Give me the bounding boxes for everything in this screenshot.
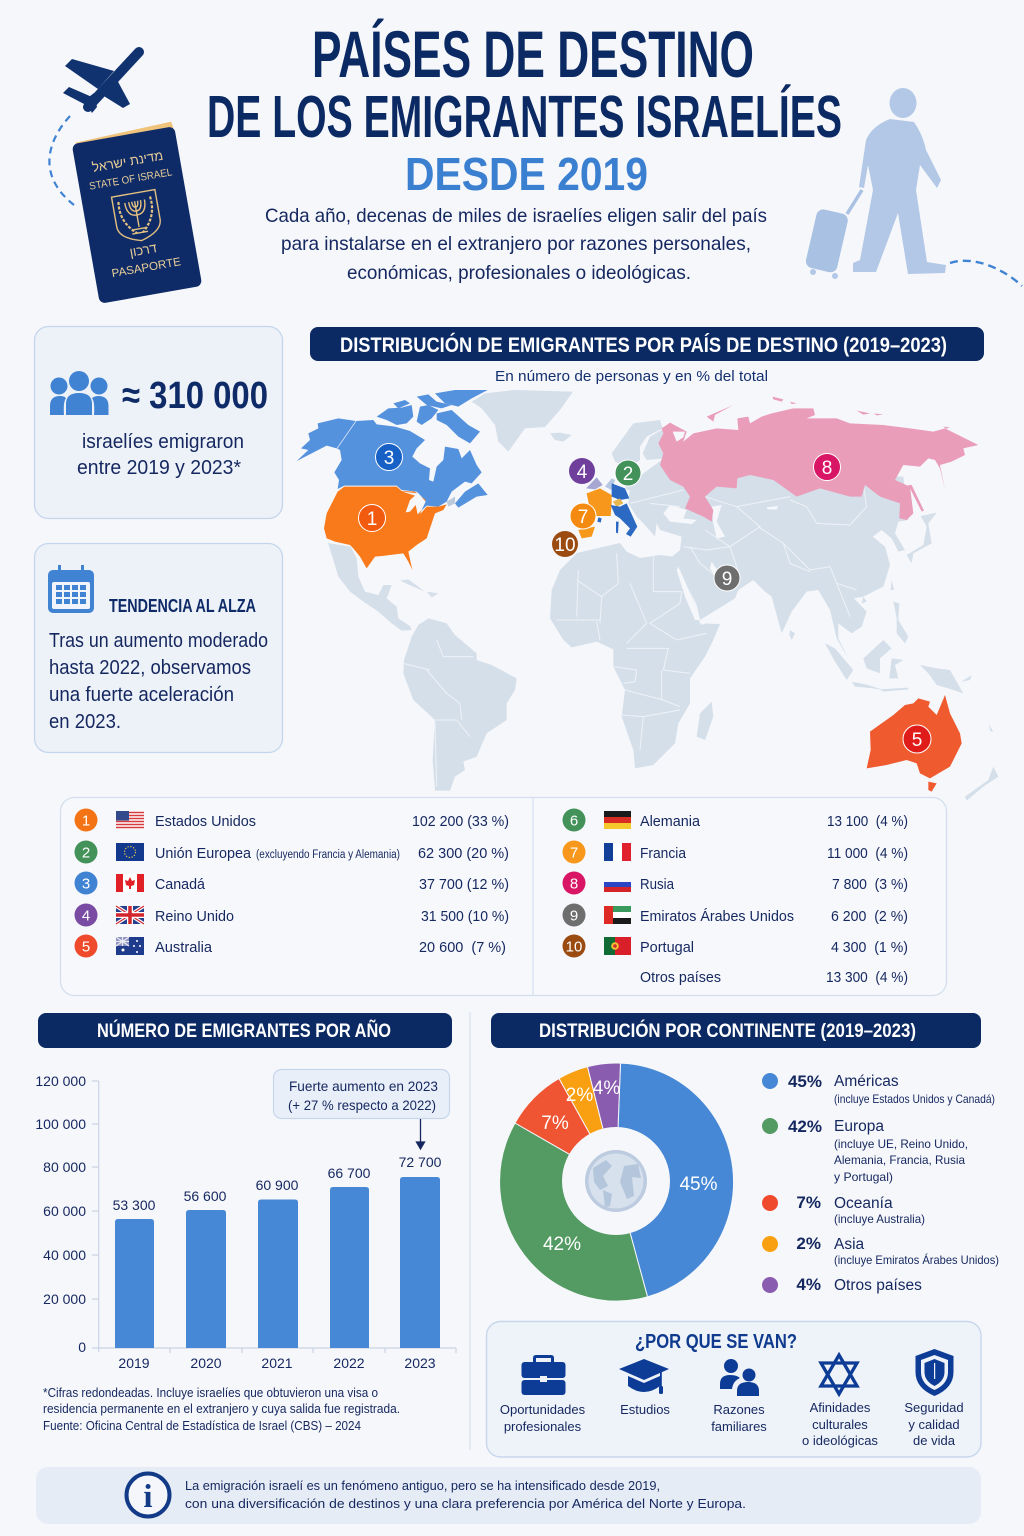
donut labels: 7% <box>541 1113 569 1134</box>
year labels: 2019 <box>118 1355 150 1371</box>
flight path: left <box>49 116 74 205</box>
callout <box>274 1070 450 1118</box>
legend notes: y Portugal) <box>834 1170 893 1184</box>
intro text: económicas, profesionales o ideológicas. <box>347 262 691 284</box>
donut labels: 4% <box>593 1078 620 1099</box>
map heading: DISTRIBUCIÓN DE EMIGRANTES POR PAÍS DE DESTINO (2019–2023) <box>340 333 947 357</box>
footnote <box>43 1386 400 1433</box>
Australia <box>867 695 962 792</box>
land: Asia <box>628 460 937 658</box>
title <box>207 17 842 200</box>
icon: briefcase <box>522 1355 566 1395</box>
icon labels <box>500 1400 964 1448</box>
legend text: Reino Unido <box>155 908 234 925</box>
y axis labels: 80 000 <box>43 1159 86 1175</box>
flag: France <box>604 843 631 861</box>
legend text: Emiratos Árabes Unidos <box>640 908 794 925</box>
land: South-East Asia and Oceania <box>789 602 998 801</box>
y axis labels: 120 000 <box>35 1073 86 1089</box>
bar values: 53 300 <box>113 1197 156 1213</box>
panel: country legend <box>60 798 946 996</box>
Russia <box>658 397 978 522</box>
icon labels: familiares <box>711 1419 767 1434</box>
icon: star of David <box>821 1355 857 1394</box>
donut labels: 42% <box>543 1234 581 1255</box>
title: PAÍSES DE DESTINO <box>312 17 754 91</box>
icon labels: culturales <box>812 1417 868 1432</box>
banner text: con una diversificación de destinos y una clara preferencia por América del Norte y Europa. <box>185 1496 746 1511</box>
year labels: 2022 <box>333 1355 365 1371</box>
map subtitle: En número de personas y en % del total <box>495 368 768 385</box>
Europe highlighted countries <box>578 477 637 538</box>
legend text: Australia <box>155 939 213 956</box>
flag: Australia <box>116 937 144 955</box>
legend text: 102 200 (33 %) <box>412 813 509 830</box>
description: israelíes emigraron <box>82 431 244 453</box>
trend heading: TENDENCIA AL ALZA <box>109 596 256 616</box>
bar values <box>113 1154 442 1213</box>
bars <box>115 1177 440 1348</box>
legend badges <box>74 808 586 958</box>
icon labels: y calidad <box>908 1417 960 1432</box>
icon: passport <box>71 121 202 304</box>
year labels: 2023 <box>404 1355 436 1371</box>
bar values: 56 600 <box>184 1188 227 1204</box>
legend markers <box>762 1073 778 1293</box>
icon labels: Estudios <box>620 1402 670 1417</box>
flag: Germany <box>604 811 631 829</box>
legend badges: 8 <box>570 876 578 892</box>
map badges: 7 <box>578 507 588 528</box>
y axis labels: 60 000 <box>43 1203 86 1219</box>
y axis labels: 20 000 <box>43 1291 86 1307</box>
world map <box>297 390 998 801</box>
trend text: hasta 2022, observamos <box>49 657 251 679</box>
y axis labels: 100 000 <box>35 1116 86 1132</box>
legend notes: (incluye Australia) <box>834 1212 925 1226</box>
intro text <box>265 205 767 284</box>
trend text: una fuerte aceleración <box>49 684 234 706</box>
icon labels: profesionales <box>504 1419 582 1434</box>
icon: globe <box>585 1150 647 1212</box>
icon: passport: PASAPORTE <box>111 256 182 280</box>
bar values: 66 700 <box>328 1165 371 1181</box>
banner text: La emigración israelí es un fenómeno antiguo, pero se ha intensificado desde 2019, <box>185 1478 660 1493</box>
trend text: en 2023. <box>49 711 121 733</box>
legend badges: 7 <box>570 844 578 862</box>
legend text: 20 600 (7 %) <box>419 939 506 956</box>
panel: why they leave <box>486 1322 981 1457</box>
legend percentages: 42% <box>788 1117 822 1136</box>
icon: people <box>50 371 108 415</box>
legend text: 62 300 (20 %) <box>418 845 509 862</box>
banner text <box>185 1478 746 1511</box>
big number: ≈ 310 000 <box>122 375 268 417</box>
title: DESDE 2019 <box>405 148 648 200</box>
donut labels: 45% <box>679 1174 718 1195</box>
map badges: 3 <box>384 448 394 469</box>
map badges: 8 <box>822 458 832 479</box>
legend text: 7 800 (3 %) <box>832 876 908 893</box>
legend badges: 10 <box>566 938 582 956</box>
panel heading: ¿POR QUE SE VAN? <box>635 1331 797 1353</box>
info banner <box>36 1467 981 1524</box>
flag: Portugal <box>604 937 631 955</box>
legend percentages: 7% <box>796 1193 821 1212</box>
bar chart <box>35 1070 456 1371</box>
legend notes: Alemania, Francia, Rusia <box>834 1153 965 1167</box>
y axis labels: 0 <box>78 1339 86 1355</box>
year labels: 2020 <box>190 1355 222 1371</box>
legend names <box>834 1073 922 1294</box>
bar values: 60 900 <box>256 1177 299 1193</box>
legend badges: 5 <box>82 938 90 956</box>
panel: total emigrants <box>34 326 282 518</box>
map badges: 4 <box>577 462 588 483</box>
year labels: 2021 <box>261 1355 293 1371</box>
donut labels: 2% <box>566 1085 593 1106</box>
legend text: 13 300 (4 %) <box>826 969 908 986</box>
legend text: 37 700 (12 %) <box>419 876 509 893</box>
legend text: Portugal <box>640 939 694 956</box>
heading: distribution by continent <box>491 1013 981 1048</box>
land: Europe north and Atlantic islands <box>550 420 666 490</box>
footnote: residencia permanente en el extranjero y cuya salida fue registrada. <box>43 1402 400 1416</box>
icon labels: Seguridad <box>904 1400 964 1415</box>
legend text: Francia <box>640 845 687 862</box>
legend text: (excluyendo Francia y Alemania) <box>256 849 400 861</box>
donut legend <box>762 1072 999 1294</box>
icon labels: o ideológicas <box>802 1433 878 1448</box>
icon: info: i <box>143 1479 153 1515</box>
arrow <box>416 1119 424 1149</box>
icon labels: Oportunidades <box>500 1402 586 1417</box>
map badges: 2 <box>623 464 633 485</box>
legend text: Alemania <box>640 813 701 830</box>
flag: European Union <box>116 843 144 861</box>
icon: family <box>720 1359 759 1396</box>
flag: United Kingdom <box>116 906 144 924</box>
legend text: Otros países <box>640 969 721 986</box>
bar values: 72 700 <box>399 1154 442 1170</box>
legend text: 4 300 (1 %) <box>831 939 908 956</box>
icon labels: de vida <box>913 1433 956 1448</box>
legend badges: 3 <box>82 876 90 892</box>
legend names: Europa <box>834 1118 884 1135</box>
y axis labels <box>35 1073 86 1355</box>
map heading <box>310 327 984 361</box>
Canada <box>297 390 488 513</box>
legend text: 31 500 (10 %) <box>421 908 509 925</box>
footnote: *Cifras redondeadas. Incluye israelíes que obtuvieron una visa o <box>43 1386 378 1400</box>
legend badges: 2 <box>82 844 90 862</box>
legend notes: (incluye Emiratos Árabes Unidos) <box>834 1252 999 1267</box>
flag: Canada <box>116 874 144 892</box>
legend percentages: 4% <box>796 1275 821 1294</box>
year labels <box>118 1355 436 1371</box>
legend badges: 4 <box>82 908 90 924</box>
legend badges: 6 <box>570 812 578 830</box>
legend text: Unión Europea <box>155 845 252 862</box>
map badges: 10 <box>554 535 576 556</box>
legend names: Asia <box>834 1236 865 1253</box>
legend text: 6 200 (2 %) <box>831 908 908 925</box>
flag: Russia <box>604 877 631 892</box>
callout: Fuerte aumento en 2023 <box>289 1078 438 1094</box>
panel: upward trend <box>34 544 282 752</box>
icon labels: Afinidades <box>810 1400 871 1415</box>
icon: passport: STATE OF ISRAEL <box>88 166 173 193</box>
intro text: Cada año, decenas de miles de israelíes eligen salir del país <box>265 205 767 227</box>
legend notes: (incluye Estados Unidos y Canadá) <box>834 1092 995 1106</box>
description <box>77 431 244 479</box>
legend text: 11 000 (4 %) <box>827 845 908 862</box>
flag: United Arab Emirates <box>604 906 631 924</box>
description: entre 2019 y 2023* <box>77 457 241 479</box>
land: Americas and Africa <box>328 543 720 791</box>
map badges <box>358 444 931 753</box>
legend badges: 1 <box>82 812 90 830</box>
icon: walking traveller <box>805 88 946 279</box>
map badges: 5 <box>912 730 922 751</box>
legend text: 13 100 (4 %) <box>827 813 908 830</box>
heading: distribution by continent: DISTRIBUCIÓN POR CONTINENTE (2019–2023) <box>539 1020 916 1042</box>
flag: United States <box>116 811 144 829</box>
donut chart <box>500 1063 734 1301</box>
icon: info <box>126 1474 170 1516</box>
legend badges: 9 <box>570 908 578 924</box>
legend names: Oceanía <box>834 1195 893 1212</box>
heading: emigrants per year <box>38 1013 452 1048</box>
legend percentages: 45% <box>788 1072 822 1091</box>
icon: graduation cap <box>619 1359 669 1394</box>
icon: calendar <box>48 565 94 613</box>
legend names: Otros países <box>834 1277 922 1294</box>
icon: airplane <box>63 52 139 113</box>
icon: passport: דרכון <box>128 240 158 260</box>
legend names: Américas <box>834 1073 899 1090</box>
icon: passport: מדינת ישראל <box>91 148 164 175</box>
legend notes: (incluye UE, Reino Unido, <box>834 1137 968 1151</box>
map badges: 1 <box>367 509 377 530</box>
legend percentages: 2% <box>796 1234 821 1253</box>
donut labels <box>541 1078 718 1255</box>
y axis labels: 40 000 <box>43 1247 86 1263</box>
legend text <box>155 813 908 986</box>
trend text <box>49 630 268 733</box>
inland seas <box>663 505 778 625</box>
legend text: Rusia <box>640 876 675 893</box>
United States <box>324 487 447 570</box>
legend notes <box>834 1092 999 1267</box>
legend text: Canadá <box>155 876 206 893</box>
legend text: Estados Unidos <box>155 813 256 830</box>
footnote: Fuente: Oficina Central de Estadística de Israel (CBS) – 2024 <box>43 1419 361 1433</box>
legend percentages <box>788 1072 822 1294</box>
intro text: para instalarse en el extranjero por razones personales, <box>281 233 751 255</box>
flight path: right <box>950 261 1022 286</box>
heading: emigrants per year: NÚMERO DE EMIGRANTES POR AÑO <box>97 1020 391 1042</box>
land: Greenland <box>472 390 573 452</box>
map badges: 9 <box>722 569 732 590</box>
trend text: Tras un aumento moderado <box>49 630 268 652</box>
icon labels: Razones <box>713 1402 765 1417</box>
icon: shield <box>916 1349 954 1396</box>
callout: (+ 27 % respecto a 2022) <box>288 1097 436 1113</box>
